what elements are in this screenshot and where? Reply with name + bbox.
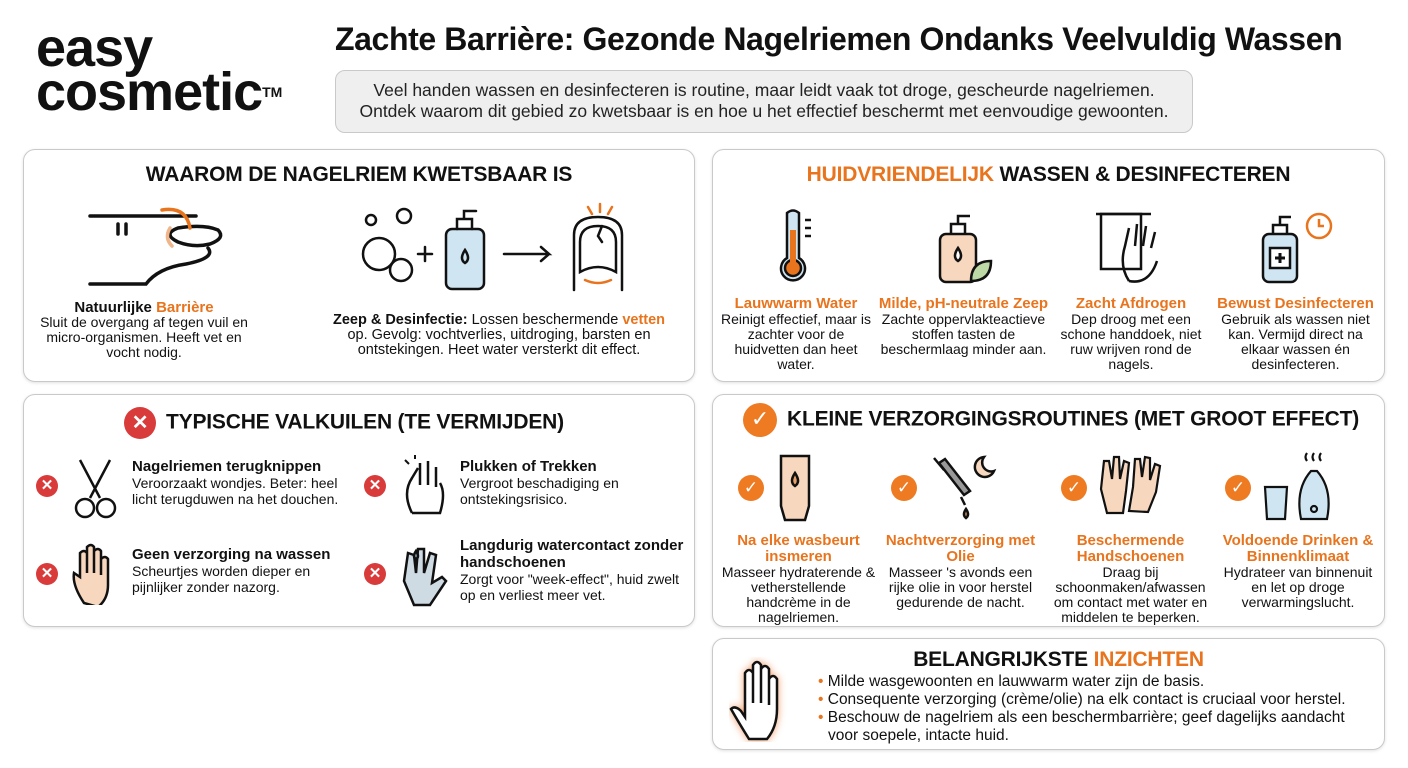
pitfall: geen verzorging: ✕ — [41, 565, 53, 582]
text: lauwwarm water: Lauwwarm Water — [735, 295, 857, 312]
pitfall: plukken: Vergroot beschadiging en ontstekingsrisico. — [460, 475, 619, 507]
heading: KLEINE VERZORGINGSROUTINES (MET GROOT EFFECT) — [787, 408, 1359, 431]
text: drinken: Hydrateer van binnenuit en let op droge verwarmingslucht. — [1224, 564, 1372, 610]
text: na elke wasbeurt — [722, 532, 875, 625]
subtitle box: Veel handen wassen en desinfecteren is routine, maar leidt vaak tot droge, gescheurde nagelriemen. — [373, 80, 1155, 100]
subtitle box — [335, 70, 1193, 133]
icon: dropper moon — [891, 456, 996, 520]
icon: hand — [729, 657, 784, 742]
heading: TYPISCHE VALKUILEN (TE VERMIJDEN) — [166, 411, 564, 434]
panel: verzorgingsroutines — [712, 394, 1385, 627]
pitfall: geen verzorging — [36, 544, 330, 605]
pitfall: geen verzorging: Geen verzorging na wassen — [132, 546, 330, 563]
panel: waarom kwetsbaar — [23, 149, 695, 382]
heading — [124, 407, 564, 439]
pitfall: watercontact — [364, 537, 684, 606]
text: natuurlijke barriere: Sluit de overgang af tegen vuil en micro-organismen. Heeft vet en vocht nodig. — [40, 314, 248, 360]
heading: ✓ — [751, 407, 769, 432]
bullets: • Milde wasgewoonten en lauwwarm water zijn de basis. — [818, 673, 1204, 690]
icon: water humidifier: ✓ — [1231, 478, 1245, 498]
icon: gloves — [1061, 456, 1162, 514]
text: nachtverzorging: Nachtverzorging met Olie — [886, 532, 1035, 565]
text: bewust desinfecteren: Bewust Desinfecteren — [1217, 295, 1374, 312]
heading: WAAROM DE NAGELRIEM KWETSBAAR IS — [146, 163, 572, 186]
pitfall: watercontact: Langdurig watercontact zonder handschoenen — [460, 537, 683, 571]
text: handschoenen: Beschermende Handschoenen — [1077, 532, 1184, 565]
icon: thermometer — [780, 209, 811, 282]
text: handschoenen: Draag bij schoonmaken/afwassen om contact met water en middelen te beperken. — [1054, 564, 1207, 625]
text: natuurlijke barriere: Natuurlijke Barrière — [74, 299, 214, 316]
text: na elke wasbeurt: Na elke wasbeurt insmeren — [737, 532, 860, 565]
pitfall: geen verzorging: Scheurtjes worden dieper en pijnlijker zonder nazorg. — [132, 563, 310, 595]
panel: huidvriendelijk wassen — [712, 149, 1385, 382]
pitfall: terugknippen — [36, 458, 338, 518]
text: milde zeep: Zachte oppervlakteactieve stoffen tasten de beschermlaag minder aan. — [881, 311, 1046, 357]
subtitle box: Ontdek waarom dit gebied zo kwetsbaar is en hoe u het effectief beschermt met eenvoudige gewoonten. — [359, 101, 1169, 121]
icon: dropper moon: ✓ — [897, 478, 911, 498]
icon: towel hand — [1096, 212, 1158, 283]
pitfall: plukken: ✕ — [369, 477, 381, 494]
icon: cream tube — [738, 454, 810, 522]
text: drinken: Voldoende Drinken & Binnenklimaat — [1223, 532, 1373, 565]
icon: finger — [88, 208, 222, 286]
icon: soap plus arrow nail — [362, 202, 624, 292]
title: Zachte Barrière: Gezonde Nagelriemen Ondanks Veelvuldig Wassen — [335, 21, 1342, 57]
icon: sanitizer clock — [1262, 212, 1332, 284]
pitfall: plukken — [364, 455, 619, 514]
logo: cosmeticTM — [36, 62, 282, 122]
text: na elke wasbeurt: Masseer hydraterende & vetherstellende handcrème in de nagelriemen. — [722, 564, 875, 625]
heading: HUIDVRIENDELIJK WASSEN & DESINFECTEREN — [807, 163, 1290, 186]
pitfall: watercontact: ✕ — [369, 565, 381, 582]
text: zeep desinfectie: Zeep & Desinfectie: Lossen beschermende vetten op. Gevolg: vochtverlies, uitdroging, barsten en ontstekingen. Heet water versterkt dit effect. — [333, 312, 665, 358]
bullets: • Consequente verzorging (crème/olie) na elk contact is cruciaal voor herstel. — [818, 691, 1346, 708]
pitfall: watercontact: Zorgt voor "week-effect", huid zwelt op en verliest meer vet. — [460, 571, 679, 603]
pitfall: plukken: Plukken of Trekken — [460, 458, 597, 475]
bullets — [818, 673, 1346, 744]
heading — [743, 403, 1359, 437]
text: zacht afdrogen: Dep droog met een schone handdoek, niet ruw wrijven rond de nagels. — [1061, 311, 1201, 372]
icon: gloves: ✓ — [1067, 478, 1081, 498]
text: nachtverzorging — [886, 532, 1035, 610]
text: handschoenen — [1054, 532, 1207, 625]
text: bewust desinfecteren: Gebruik als wassen niet kan. Vermijd direct na elkaar wassen én desinfecteren. — [1221, 311, 1370, 372]
logo — [36, 18, 282, 122]
pitfall: terugknippen: Veroorzaakt wondjes. Beter: heel licht terugduwen na het douchen. — [132, 475, 338, 507]
pitfall: terugknippen: ✕ — [41, 477, 53, 494]
pitfall: terugknippen: Nagelriemen terugknippen — [132, 458, 321, 475]
panel: inzichten — [712, 638, 1385, 750]
text: drinken — [1222, 532, 1373, 610]
logo: easy — [36, 18, 152, 78]
text: zacht afdrogen: Zacht Afdrogen — [1076, 295, 1186, 312]
heading: ✕ — [132, 412, 148, 434]
bullets: • Beschouw de nagelriem als een beschermbarrière; geef dagelijks aandacht voor soepele, intacte huid. — [818, 709, 1345, 744]
text: milde zeep: Milde, pH-neutrale Zeep — [879, 295, 1048, 312]
text: nachtverzorging: Masseer 's avonds een rijke olie in voor herstel gedurende de nacht. — [889, 564, 1032, 610]
icon: mild soap — [938, 214, 992, 284]
icon: water humidifier — [1225, 452, 1330, 520]
icon: cream tube: ✓ — [744, 478, 758, 498]
text: lauwwarm water: Reinigt effectief, maar is zachter voor de huidvetten dan heet water. — [721, 311, 871, 372]
panel: valkuilen — [23, 394, 695, 627]
heading: BELANGRIJKSTE INZICHTEN — [913, 648, 1204, 671]
